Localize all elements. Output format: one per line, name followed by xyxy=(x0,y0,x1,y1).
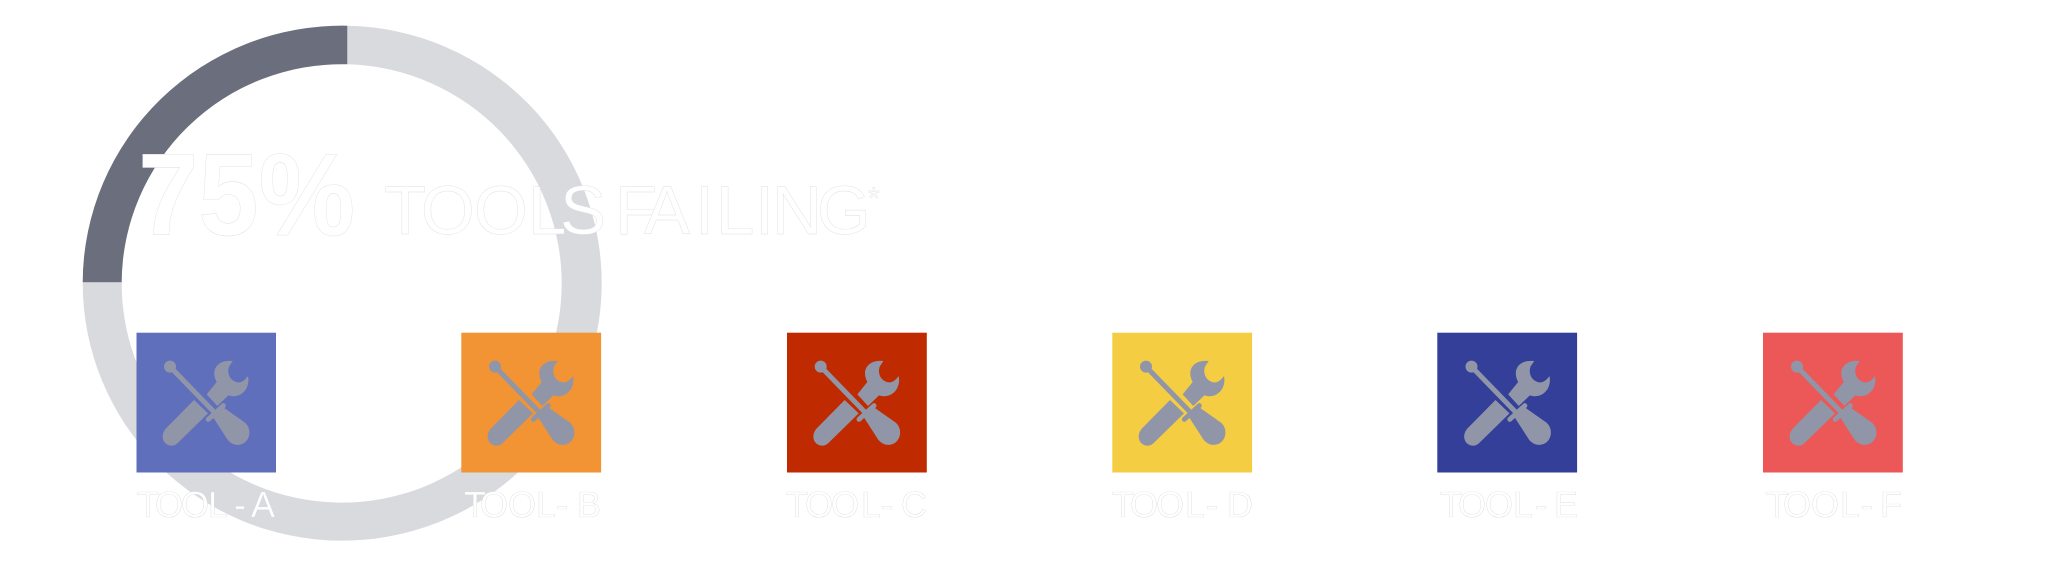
tile background xyxy=(1112,333,1252,472)
ring progress arc xyxy=(83,26,347,282)
label: TOOL - E xyxy=(1440,484,1578,525)
heading: 75% tools failing xyxy=(138,129,880,260)
tool F tile xyxy=(1763,333,1903,525)
icon: wrench and screwdriver xyxy=(1139,361,1225,446)
tile background xyxy=(1437,333,1577,472)
ring track xyxy=(83,26,602,541)
tile background xyxy=(461,333,601,472)
icon: wrench and screwdriver xyxy=(813,361,900,446)
icon: wrench and screwdriver xyxy=(163,361,249,446)
label: TOOL - B xyxy=(464,484,601,525)
icon: wrench and screwdriver xyxy=(488,361,574,446)
label: TOOL - D xyxy=(1112,484,1253,525)
heading text: TOOLS FAILING xyxy=(384,172,871,249)
tile background xyxy=(1763,333,1903,472)
tool B tile xyxy=(461,333,601,525)
ring chart: 75% tools failing xyxy=(83,26,602,541)
tool A tile xyxy=(136,333,276,525)
tile background xyxy=(136,333,276,472)
icon: wrench and screwdriver xyxy=(1464,361,1551,446)
label: TOOL - F xyxy=(1766,484,1902,525)
label: TOOL - C xyxy=(786,484,927,525)
icon: wrench and screwdriver xyxy=(1790,361,1876,446)
tool C tile xyxy=(786,333,927,525)
tile background xyxy=(787,333,927,472)
tool E tile xyxy=(1437,333,1578,525)
big percentage: 75% xyxy=(138,129,355,260)
asterisk: * xyxy=(868,182,880,215)
tool D tile xyxy=(1112,333,1253,525)
label: TOOL - A xyxy=(137,484,275,525)
